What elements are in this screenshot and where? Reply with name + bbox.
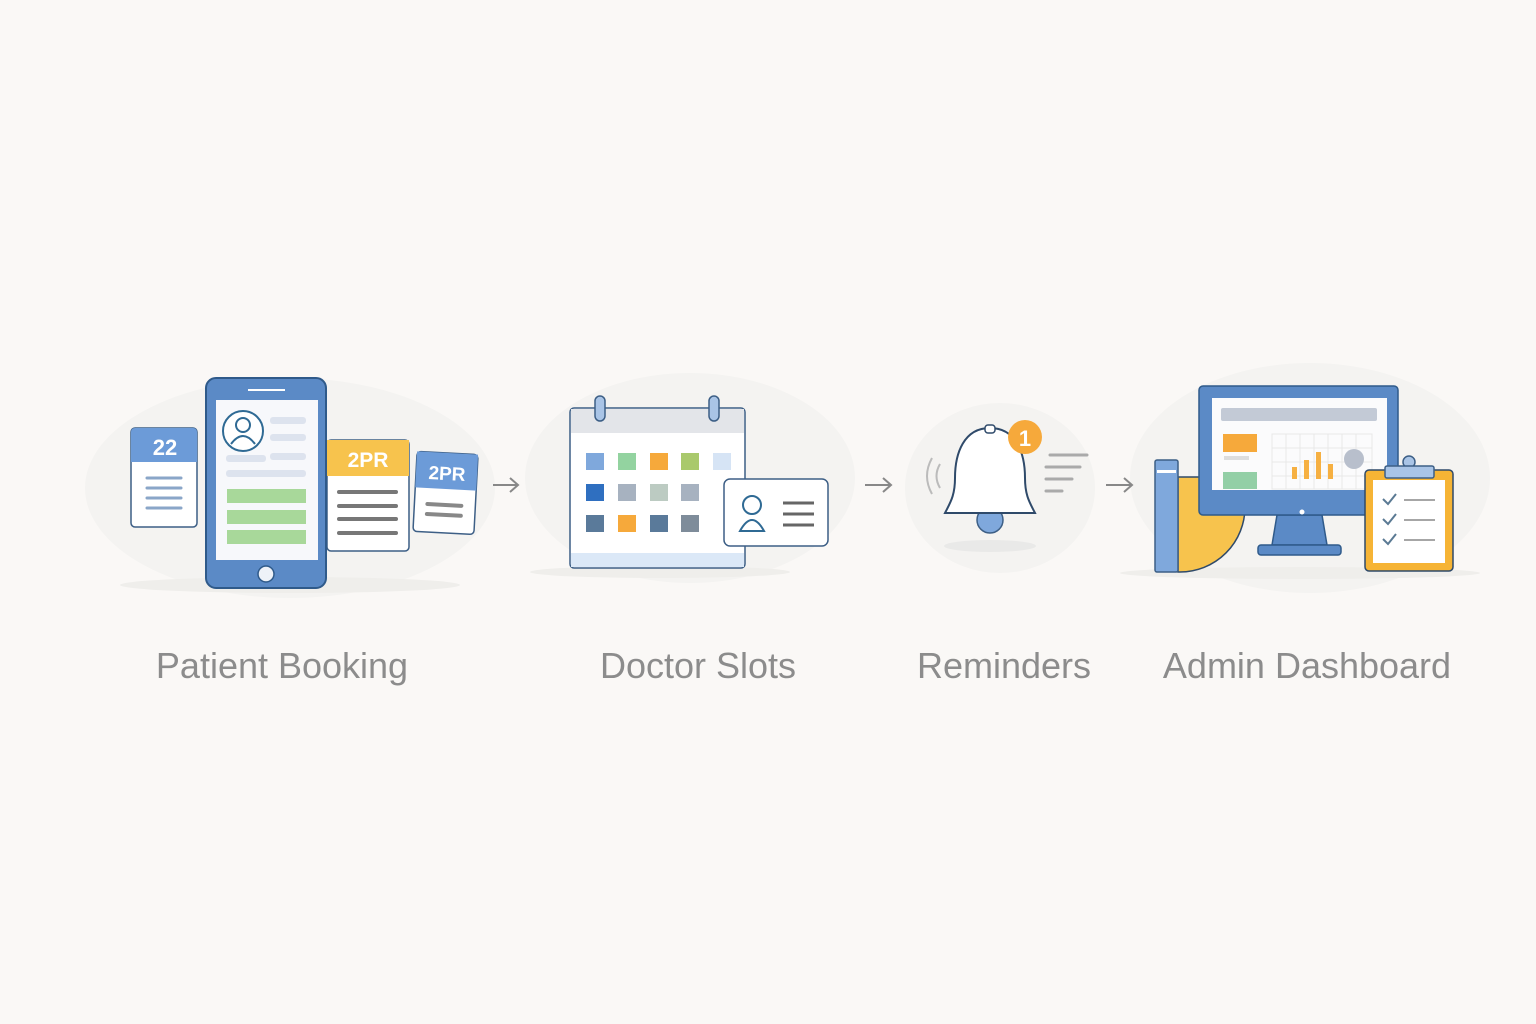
arrow 1 xyxy=(493,478,518,492)
label: Patient Booking: Patient Booking xyxy=(156,645,408,686)
panel: reminders xyxy=(905,403,1095,573)
label: Admin Dashboard: Admin Dashboard xyxy=(1163,645,1451,686)
arrow 2 xyxy=(865,478,891,492)
icon: calendar card 22 xyxy=(131,428,197,527)
panel: patient booking xyxy=(85,378,495,598)
icon: blue 2PR card: 2PR xyxy=(428,463,466,486)
panel: admin dashboard xyxy=(1120,363,1490,593)
icon: blue 2PR card xyxy=(413,451,478,535)
icon: yellow 2PR card: 2PR xyxy=(348,449,388,472)
icon: doctor card xyxy=(724,479,828,546)
icon: badge 1: 1 xyxy=(1019,426,1031,451)
icon: badge 1 xyxy=(1008,420,1042,454)
icon: yellow 2PR card xyxy=(327,440,409,551)
panel: doctor slots xyxy=(525,373,855,583)
icon: clipboard xyxy=(1365,456,1453,571)
label: Reminders: Reminders xyxy=(917,645,1091,686)
icon: bell xyxy=(927,425,1087,533)
icon: folder xyxy=(1155,460,1245,572)
icon: monitor xyxy=(1199,386,1398,555)
icon: phone xyxy=(206,378,326,588)
label: Doctor Slots: Doctor Slots xyxy=(600,645,796,686)
icon: calendar xyxy=(570,396,745,568)
icon: calendar card 22: 22 xyxy=(153,435,177,460)
arrow 3 xyxy=(1106,478,1132,492)
